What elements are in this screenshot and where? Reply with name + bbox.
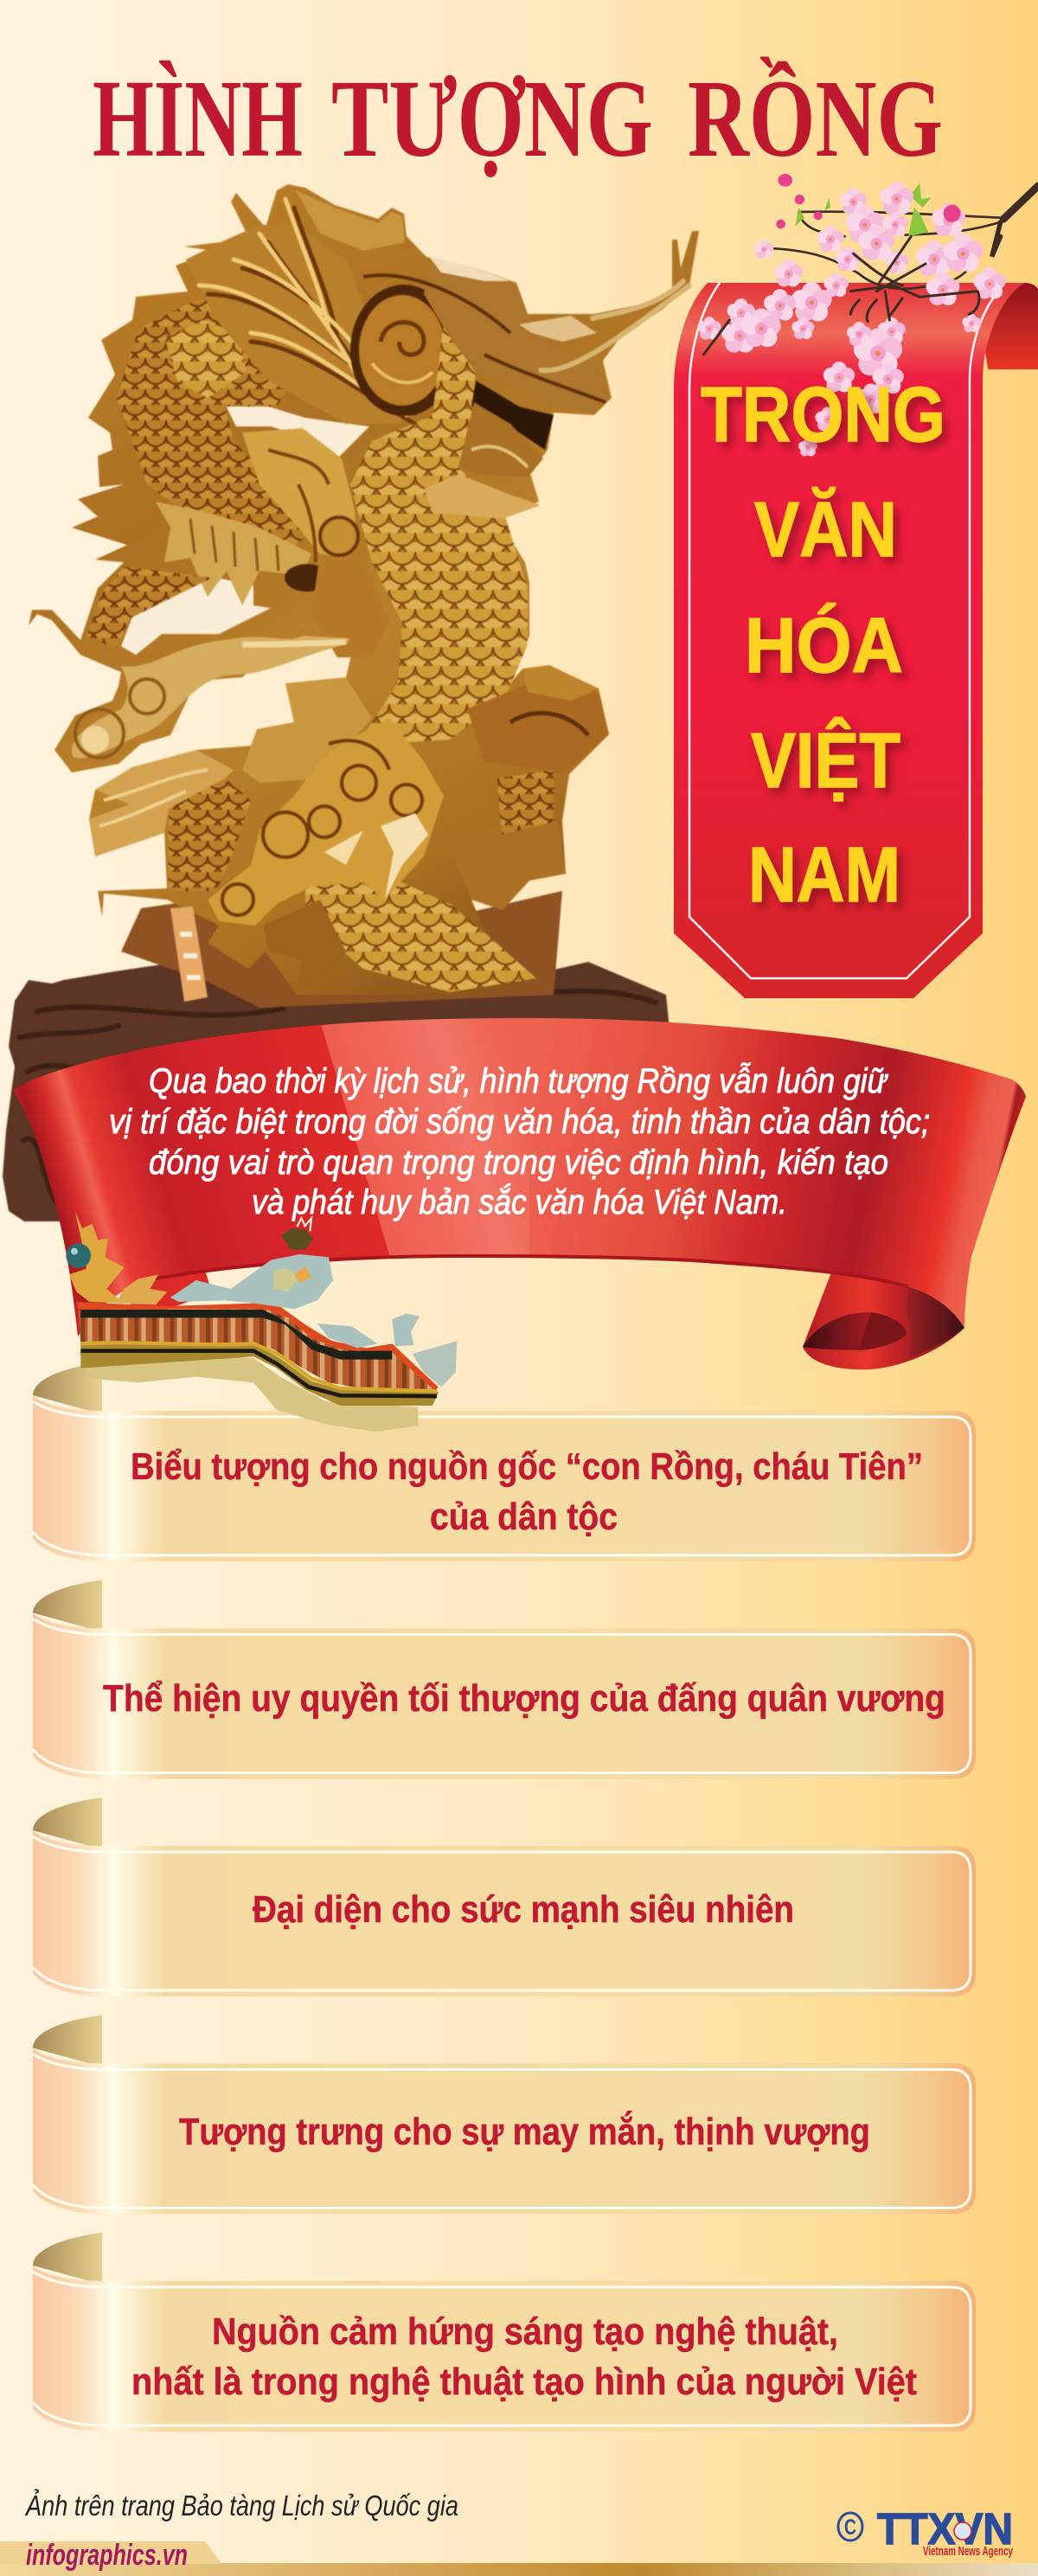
intro text: Qua bao thời kỳ lịch sử, hình tượng Rồng vẫn luôn giữ: [149, 1061, 888, 1100]
card text: của dân tộc: [430, 1496, 618, 1538]
TTXVN logo: [838, 2504, 1013, 2559]
card 5: [33, 2233, 976, 2432]
card text: Đại diện cho sức mạnh siêu nhiên: [253, 1888, 794, 1931]
banner body: [674, 283, 1025, 998]
wooden base: [3, 962, 670, 1221]
museum tag: [170, 907, 208, 1002]
card text: Tượng trưng cho sự may mắn, thịnh vượng: [179, 2110, 870, 2153]
roof dragon: [170, 1254, 333, 1309]
peach blossom branch: [697, 174, 1038, 456]
card shape: [33, 2015, 976, 2214]
whiskers: [541, 281, 689, 370]
jaw shadow: [471, 381, 554, 450]
banner fold: [952, 283, 1038, 369]
website text: infographics.vn: [26, 2539, 188, 2572]
card text: [131, 1445, 923, 1538]
base texture: [17, 986, 657, 1207]
globe: [954, 2522, 971, 2540]
card 3: [33, 1797, 976, 1996]
buds: [776, 174, 823, 228]
neck and body scales: [350, 307, 528, 744]
ribbon lower rim: [156, 1256, 908, 1286]
card 2: [33, 1580, 976, 1778]
curled ball: [350, 285, 458, 416]
upper gap: [225, 395, 369, 461]
arm highlights: [72, 636, 350, 758]
spines near lower head: [242, 677, 372, 783]
banner heading: VIỆT: [751, 716, 900, 804]
card text: Thể hiện uy quyền tối thượng của đấng quân vương: [103, 1677, 945, 1720]
belly comb: [156, 502, 311, 606]
intro text: vị trí đặc biệt trong đời sống văn hóa, tinh thần của dân tộc;: [109, 1103, 930, 1141]
blossoms: [697, 182, 1006, 456]
branches over blossoms: [703, 236, 979, 355]
roll opening: [803, 1312, 871, 1350]
card shape: [33, 1797, 976, 1996]
mane strands: [186, 225, 402, 424]
crown: [296, 190, 405, 251]
card text: [131, 2310, 917, 2403]
title: HÌNH: [93, 57, 303, 180]
banner heading: TRONG: [701, 372, 945, 458]
gold lower band: [80, 1343, 439, 1406]
beige plaster: [80, 1352, 418, 1432]
banner heading: HÓA: [745, 602, 903, 689]
gap between leg and arm: [121, 575, 271, 655]
pearl and flames: [69, 1211, 124, 1304]
red ribbon with intro text: [13, 1018, 1026, 1369]
card 1: [33, 1362, 976, 1561]
agency letters: TTXVN: [877, 2504, 1013, 2554]
gutter: [80, 1342, 437, 1391]
card text: nhất là trong nghệ thuật tạo hình của người Việt: [131, 2361, 917, 2403]
lower head: [208, 718, 444, 926]
dragon silhouette: [29, 184, 699, 995]
copyright mark: C: [844, 2515, 856, 2540]
flame tail: [115, 1274, 167, 1304]
card text: Biểu tượng cho nguồn gốc “con Rồng, cháu Tiên”: [131, 1445, 923, 1488]
branches: [774, 186, 1038, 289]
red vertical banner: [674, 283, 1038, 998]
dragon statue on wooden base: [3, 184, 699, 1221]
intro text: đóng vai trò quan trọng trong việc định hình, kiến tạo: [149, 1144, 888, 1182]
hind claw: [454, 822, 566, 910]
bottom strip: [0, 2563, 1038, 2576]
ribbon tail left: [104, 1270, 212, 1332]
dragon head: [281, 1228, 313, 1250]
left loop scales: [117, 298, 337, 554]
intro text: và phát huy bản sắc văn hóa Việt Nam.: [252, 1182, 787, 1221]
title: RỒNG: [688, 57, 943, 180]
palace roof ornament: [66, 1211, 457, 1432]
beard: [424, 474, 541, 519]
head: [424, 260, 611, 413]
website tab: [0, 2539, 221, 2572]
intro text: [109, 1061, 930, 1221]
ribbon roll: [803, 1268, 964, 1369]
lower spines: [264, 900, 346, 995]
ribbon band: [13, 1018, 1026, 1336]
card text: Nguồn cảm hứng sáng tạo nghệ thuật,: [212, 2310, 838, 2353]
banner heading: [701, 372, 945, 919]
left fin: [89, 750, 234, 856]
head highlights: [430, 258, 510, 281]
tail scales: [305, 865, 536, 992]
banner heading: NAM: [748, 832, 900, 919]
right ornament: [317, 1323, 378, 1348]
card shape: [33, 1580, 976, 1778]
fish head: [242, 428, 356, 571]
card shape: [33, 2233, 976, 2432]
photo credit: Ảnh trên trang Bảo tàng Lịch sử Quốc gia: [24, 2489, 458, 2522]
lower head scrolls: [222, 740, 422, 915]
black band: [80, 1310, 392, 1360]
card 4: [33, 2015, 976, 2214]
lower jaw: [458, 402, 543, 477]
tile band: [78, 1309, 439, 1393]
title: [93, 57, 943, 180]
lower head highlights: [381, 813, 428, 900]
body shadow: [285, 564, 330, 592]
banner heading: VĂN: [754, 486, 897, 574]
copyright mark: [838, 2513, 862, 2541]
lower leg scales: [169, 779, 251, 891]
card shape: [33, 1362, 976, 1561]
roll inner shade: [907, 1286, 964, 1358]
open bud: [944, 205, 961, 222]
ridge: [76, 1302, 439, 1391]
title: TƯỢNG: [331, 57, 653, 180]
leg wrap: [311, 554, 389, 657]
hind paw ball: [467, 683, 609, 774]
wooden stand under dragon: [121, 891, 562, 1008]
fore leg scales: [86, 567, 212, 649]
banner inner line: [689, 283, 996, 978]
leaves: [795, 183, 932, 236]
